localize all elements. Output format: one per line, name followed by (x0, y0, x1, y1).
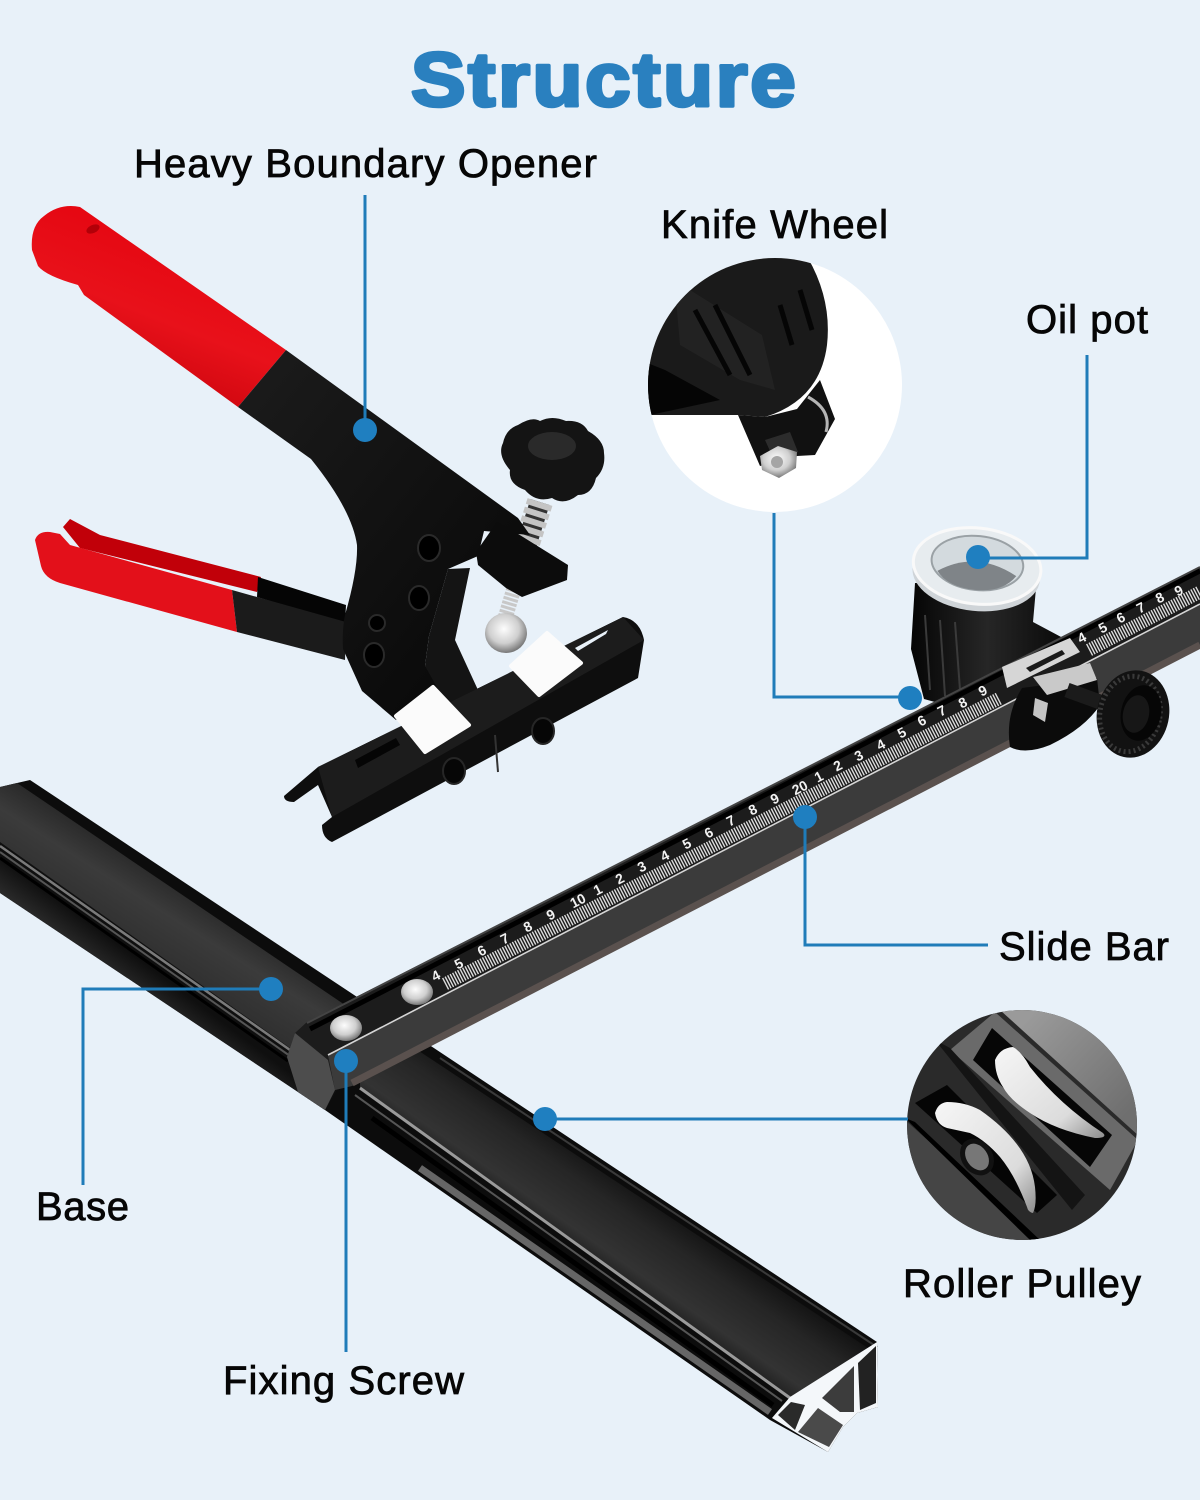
label: fixing screw: Fixing Screw (223, 1359, 464, 1403)
ruler numbers: 7 (935, 702, 949, 719)
ruler numbers: 6 (702, 824, 716, 841)
ruler numbers: 4 (658, 847, 672, 864)
ruler numbers: 9 (768, 790, 782, 807)
ruler numbers: 1 (591, 881, 605, 898)
thumb knob (1089, 663, 1177, 765)
silver screws (330, 979, 433, 1041)
ruler numbers: 9 (1172, 582, 1186, 599)
ruler numbers: 5 (680, 835, 694, 852)
ruler numbers: 9 (976, 682, 990, 699)
lower red handle (35, 519, 346, 660)
ruler numbers (429, 582, 1186, 984)
upper red handle (32, 206, 286, 407)
slotted guide base (284, 617, 644, 842)
title: Structure (411, 38, 798, 122)
ruler numbers: 4 (429, 967, 443, 984)
ruler numbers: 7 (1134, 599, 1148, 616)
oil pot cap (909, 522, 1045, 617)
ruler numbers: 8 (746, 801, 760, 818)
ruler numbers: 6 (915, 712, 929, 729)
plier body (238, 350, 530, 720)
body screws (364, 535, 440, 667)
label: slide bar: Slide Bar (999, 925, 1169, 969)
heavy boundary opener pliers (32, 206, 644, 842)
star knob (501, 418, 604, 501)
ruler numbers: 4 (874, 736, 888, 753)
ruler numbers: 6 (475, 942, 489, 959)
ruler numbers: 8 (1153, 589, 1167, 606)
roller pulley inset (905, 1010, 1140, 1240)
ruler numbers: 2 (831, 757, 845, 774)
slide bar (287, 567, 1200, 1110)
spring and screw (485, 502, 540, 653)
ruler numbers: 20 (789, 777, 810, 798)
leader: fixing screw (334, 1049, 358, 1352)
ruler numbers: 5 (452, 955, 466, 972)
leader: oil pot (966, 355, 1087, 569)
oil pot (909, 522, 1063, 720)
clamp bracket (476, 522, 568, 597)
label: base: Base (36, 1185, 129, 1229)
ruler ticks (445, 592, 1200, 984)
knife wheel inset (640, 240, 902, 512)
ruler numbers: 9 (544, 906, 558, 923)
pulley wheels (995, 1047, 1104, 1138)
white clips (396, 687, 469, 752)
leader: heavy boundary opener (353, 195, 377, 442)
leader: roller pulley (533, 1107, 908, 1131)
end cap (287, 1033, 335, 1110)
ruler numbers: 2 (613, 870, 627, 887)
ruler numbers: 7 (724, 812, 738, 829)
rail end profile (772, 1342, 878, 1452)
ruler numbers: 8 (956, 694, 970, 711)
ruler numbers: 5 (895, 724, 909, 741)
ruler numbers: 6 (1114, 609, 1128, 626)
ruler numbers: 7 (498, 930, 512, 947)
base rail (0, 780, 878, 1452)
ruler numbers: 5 (1096, 619, 1110, 636)
ruler numbers: 1 (812, 768, 826, 785)
leader: base (83, 977, 283, 1185)
label: heavy boundary opener: Heavy Boundary Opener (134, 142, 597, 186)
ruler numbers: 8 (521, 918, 535, 935)
label: knife wheel: Knife Wheel (661, 203, 888, 247)
ruler numbers: 3 (635, 858, 649, 875)
label: roller pulley: Roller Pulley (903, 1262, 1141, 1306)
leader: slide bar (793, 805, 988, 945)
ruler numbers: 3 (852, 747, 866, 764)
ruler numbers: 10 (567, 890, 588, 911)
leader: knife wheel (774, 513, 922, 710)
label: oil pot: Oil pot (1026, 298, 1148, 342)
slider clamp and thumb knob (1002, 638, 1177, 765)
ruler numbers: 4 (1075, 629, 1089, 646)
